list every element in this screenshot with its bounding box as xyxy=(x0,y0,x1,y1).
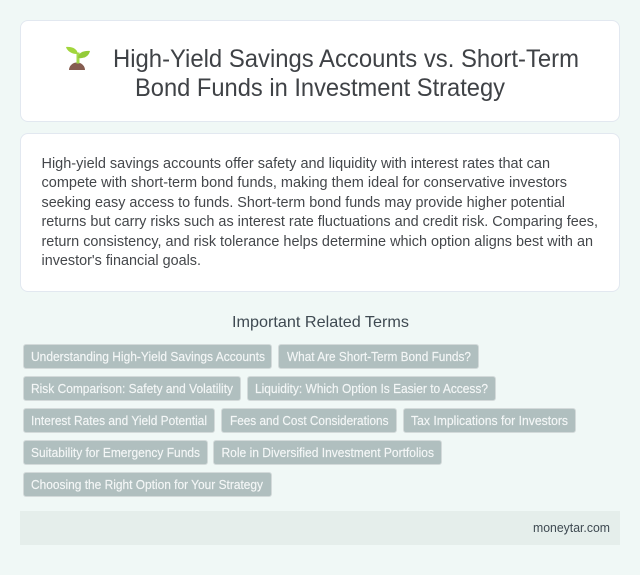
tag: portfolios xyxy=(213,440,442,465)
tag labels: What Are Short-Term Bond Funds? xyxy=(287,350,471,364)
tag: short-term xyxy=(278,344,479,369)
section heading: Important Related Terms xyxy=(232,314,409,331)
tag: choosing xyxy=(23,472,272,497)
summary text xyxy=(42,156,598,269)
title: High-Yield Savings Accounts vs. Short-Term xyxy=(113,45,579,73)
panel: title card xyxy=(20,20,620,122)
tag: understanding xyxy=(23,344,272,369)
tag labels: Interest Rates and Yield Potential xyxy=(31,414,207,428)
title: Bond Funds in Investment Strategy xyxy=(135,74,505,102)
tag: tax xyxy=(403,408,576,433)
tag: interest xyxy=(23,408,215,433)
tag labels: Suitability for Emergency Funds xyxy=(31,446,200,460)
tag labels: Risk Comparison: Safety and Volatility xyxy=(31,382,234,396)
tag: risk xyxy=(23,376,241,401)
footer bar xyxy=(20,511,620,545)
icon: seedling xyxy=(66,47,90,70)
summary text: compete with short-term bond funds, making them ideal for conservative investors xyxy=(42,175,567,191)
title xyxy=(113,45,579,102)
footer site name: moneytar.com xyxy=(533,521,610,535)
tag labels: Role in Diversified Investment Portfolios xyxy=(222,446,434,460)
tag labels: Choosing the Right Option for Your Strategy xyxy=(31,478,264,492)
summary text: return consistency, and risk tolerance helps determine which option aligns best with an xyxy=(42,234,593,250)
summary text: seeking easy access to funds. Short-term bond funds may provide higher potential xyxy=(42,195,565,211)
tag labels: Liquidity: Which Option Is Easier to Access? xyxy=(255,382,488,396)
tag: fees xyxy=(221,408,397,433)
tag labels: Fees and Cost Considerations xyxy=(230,414,388,428)
tag labels: Tax Implications for Investors xyxy=(411,414,568,428)
panel: summary card xyxy=(20,133,620,292)
summary text: High-yield savings accounts offer safety and liquidity with interest rates that can xyxy=(42,156,550,172)
tag labels: Understanding High-Yield Savings Accounts xyxy=(31,350,265,364)
summary text: returns but carry risks such as interest rate fluctuations and credit risk. Comparing fees, xyxy=(42,214,598,230)
summary text: investor's financial goals. xyxy=(42,253,201,269)
tag: liquidity xyxy=(247,376,496,401)
tag: emergency xyxy=(23,440,208,465)
tag labels xyxy=(31,350,568,492)
